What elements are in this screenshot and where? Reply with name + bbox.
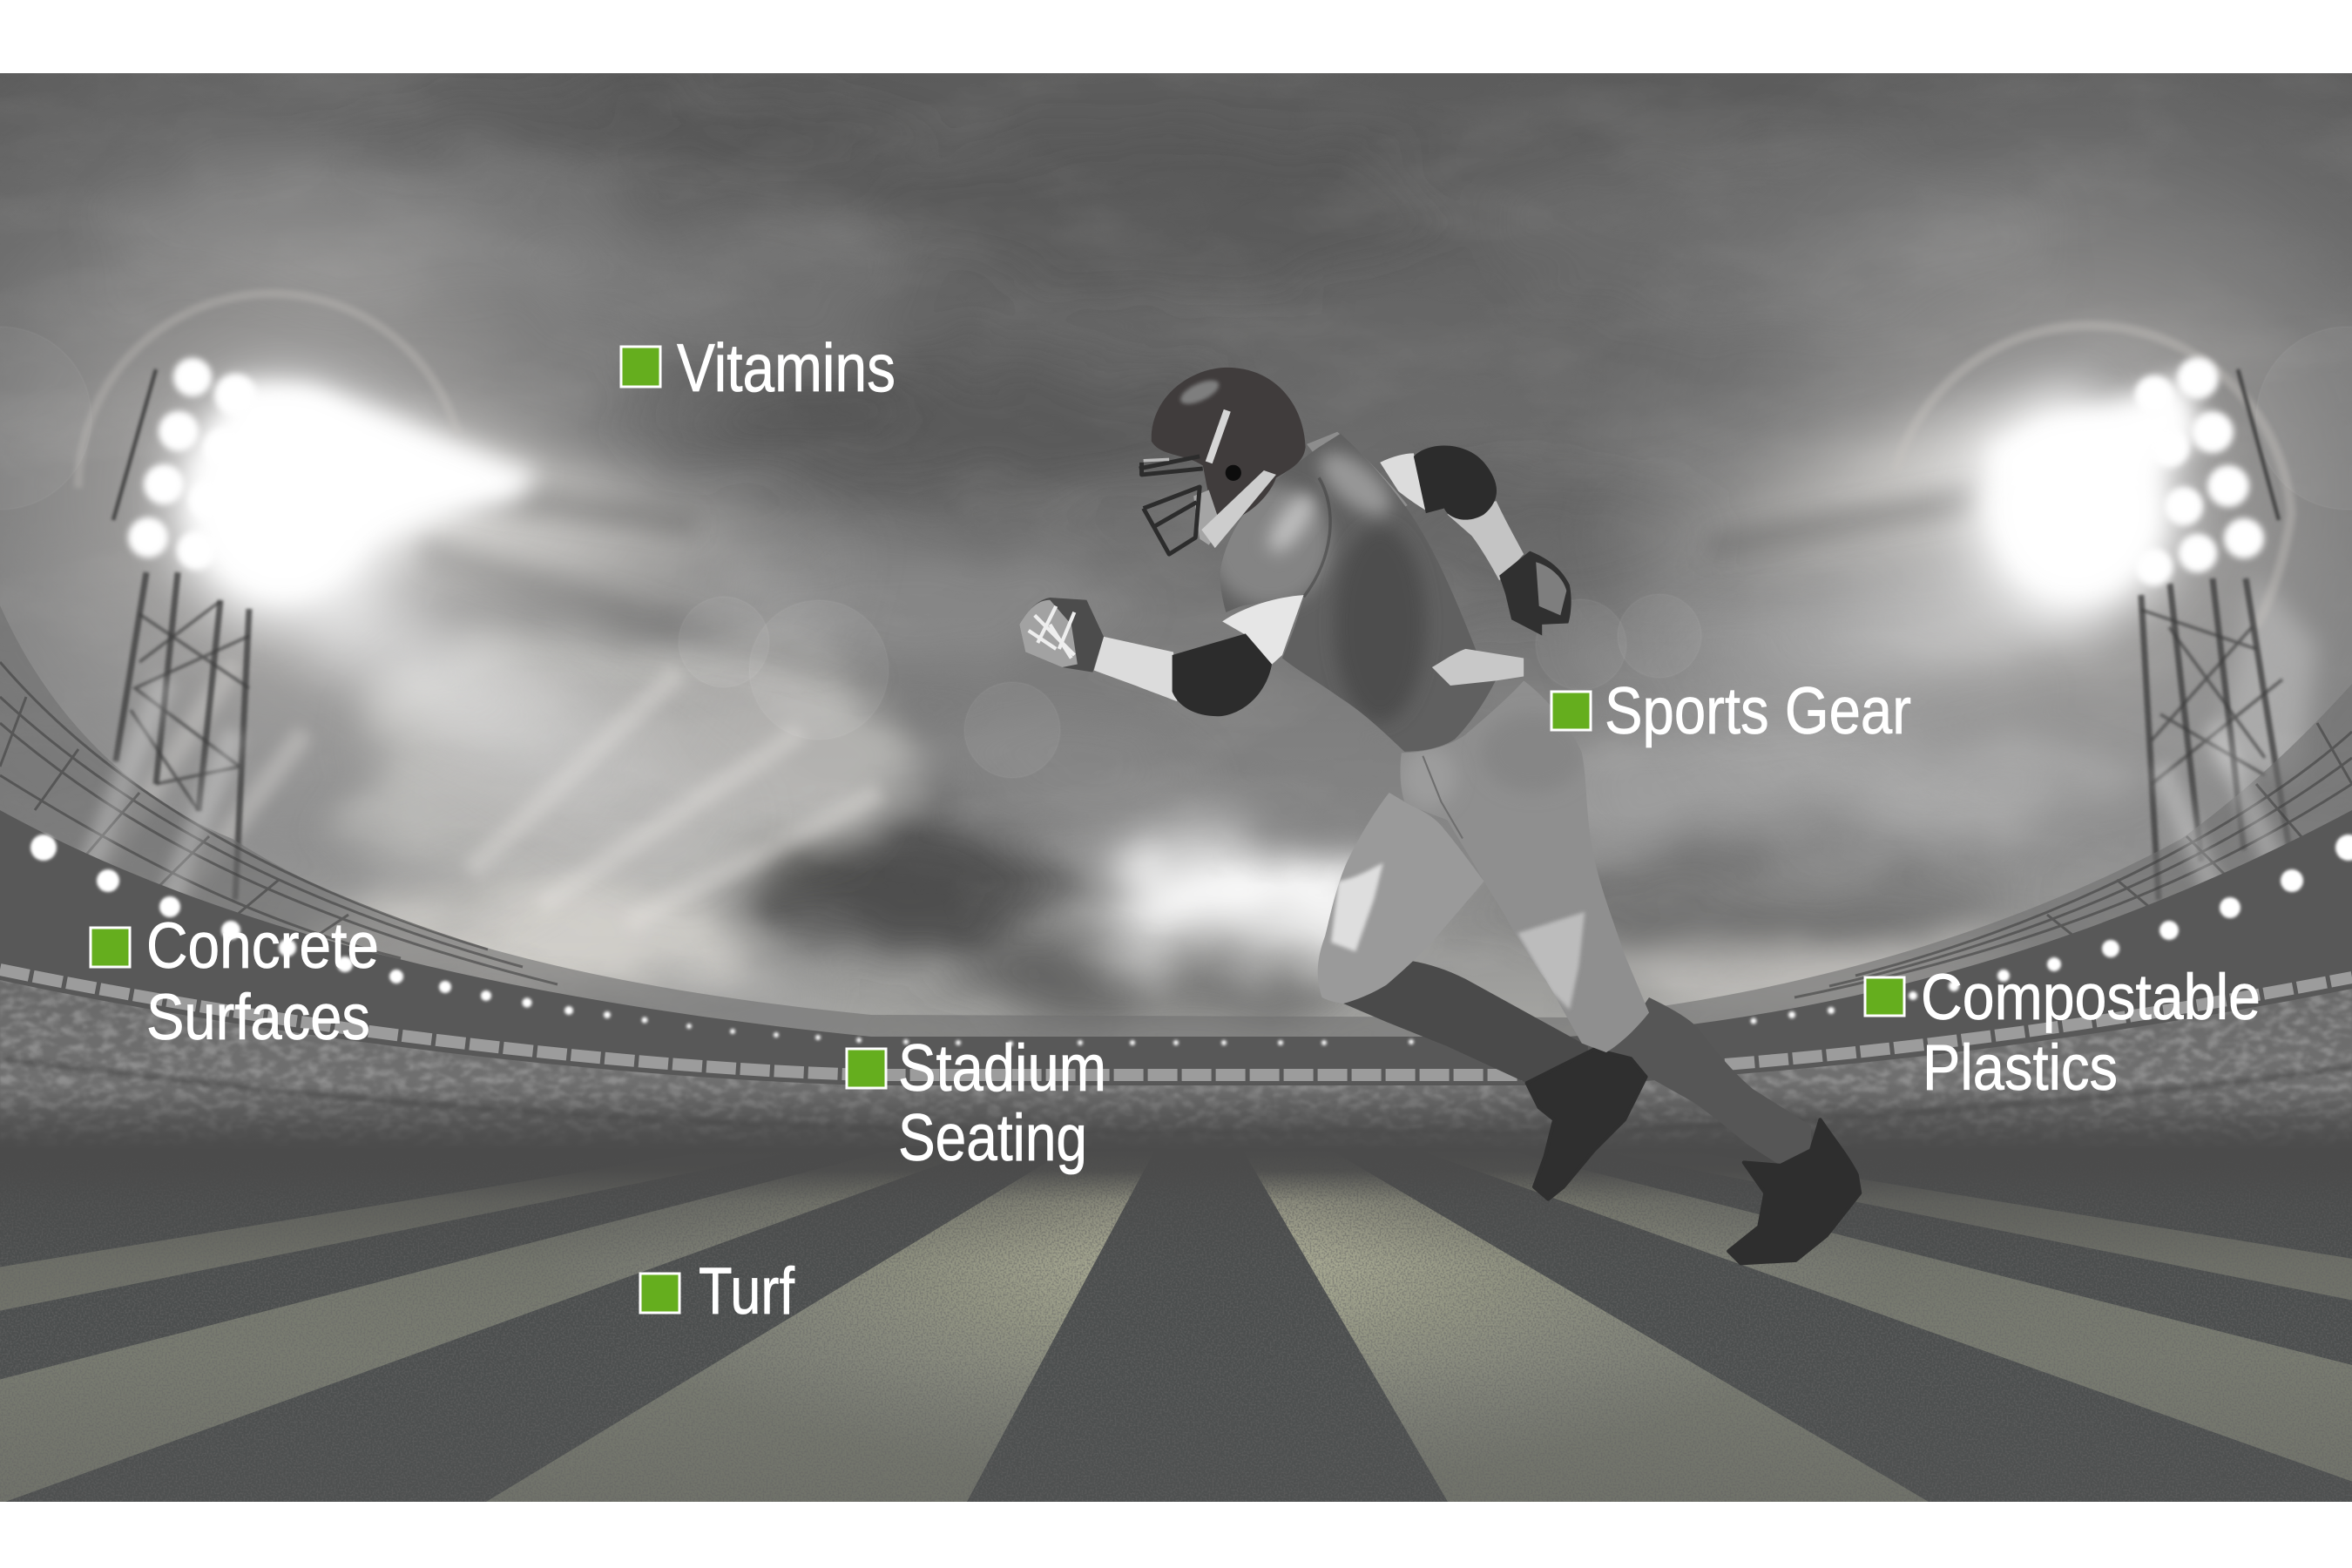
label: Concrete Surfaces: Concrete [146,909,379,982]
left floodlight glow and beams [0,73,883,924]
player front leg [1343,961,1646,1200]
football player running [1019,368,1860,1263]
label: Stadium Seating [847,1031,1106,1175]
label: Vitamins: Vitamins [677,329,896,406]
player back arm [1380,445,1571,635]
player front arm [1019,595,1304,716]
lens flare bokeh circles [0,327,2352,778]
label: Compostable Plastics [1865,961,2261,1104]
player rear leg [1612,997,1860,1263]
label: Turf: Turf [699,1254,795,1328]
label: Vitamins [621,329,896,406]
right floodlight glow and beams [1606,81,2352,850]
player helmet [1139,368,1306,554]
stadium roof and stands [0,605,2352,1176]
right floodlight tower [2141,369,2290,900]
label: Stadium Seating: Stadium [898,1031,1106,1105]
label: Compostable Plastics: Plastics [1923,1031,2118,1104]
label: Compostable Plastics: Compostable [1921,961,2261,1033]
label: Concrete Surfaces [91,909,379,1053]
floodlight lamps [125,354,2268,589]
label: Turf [640,1254,795,1328]
stadium arc lights [30,835,2352,1046]
label: Concrete Surfaces: Surfaces [146,981,370,1053]
left floodlight tower [113,369,249,900]
player pants [1318,673,1655,1058]
label: Stadium Seating: Seating [898,1101,1087,1175]
sky with clouds [0,73,2352,1040]
player jersey [1209,429,1524,759]
label: Sports Gear: Sports Gear [1605,674,1911,748]
striped turf field [0,1071,2352,1502]
